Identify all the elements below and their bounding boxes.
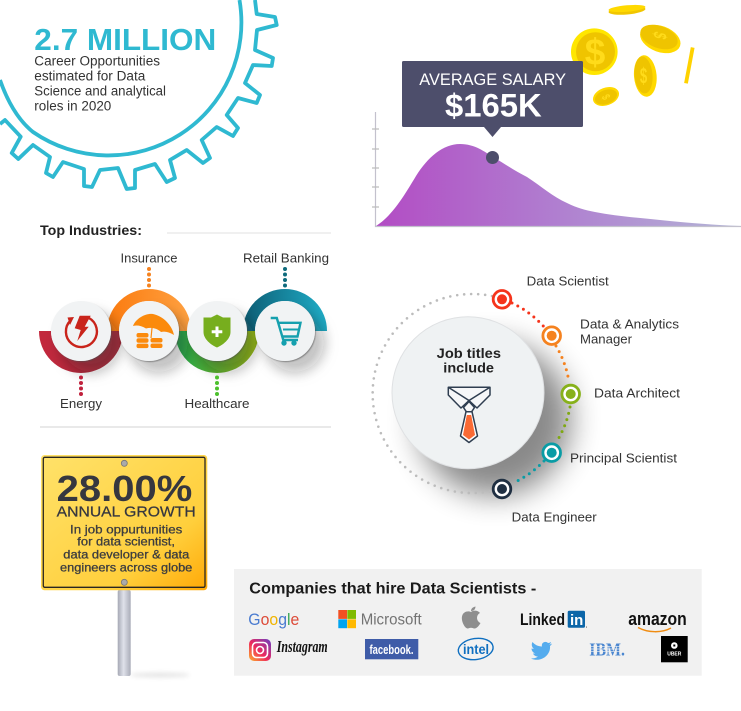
logo: linkedin: in [570,612,583,629]
description: Science and analytical [34,84,166,99]
retail banking [243,252,329,361]
logo: intel [457,636,494,662]
logo: linkedin: Linked [520,611,565,629]
logo: amazon: amazon [628,609,687,629]
logo: ibm: IBM. [589,640,625,660]
insurance [119,252,179,361]
principal scientist node: Principal Scientist [570,452,678,466]
sign board: for data scientist, [77,535,175,549]
healthcare: Healthcare [184,397,250,411]
dotted ring [373,294,570,493]
logo: instagram [249,637,328,661]
logo: facebook [365,639,418,659]
logo: apple [462,606,480,629]
icon: falling coins [571,4,693,109]
logo: microsoft [338,610,422,628]
retail banking: Retail Banking [243,252,329,266]
sign post [118,590,131,676]
icon: falling coins: $ [649,30,669,41]
logo: google: Google [248,611,299,629]
center circle [392,317,544,469]
callout: average salary: $165K [445,88,542,124]
logo: uber: UBER [667,652,682,658]
description: roles in 2020 [34,99,111,114]
center circle shadow [417,342,571,496]
principal scientist node [543,444,678,466]
icon: falling coins: $ [598,93,612,102]
logo: twitter [531,642,552,660]
panel: average salary [372,4,741,226]
data architect node: Data Architect [594,387,681,401]
sign board: data developer & data [63,547,190,561]
data scientist node [493,275,609,308]
insurance: Insurance [120,252,178,266]
panel: top industries [40,222,331,427]
panel: career opportunities [0,0,277,189]
sign board: ANNUAL GROWTH [57,505,196,521]
data and analytics manager node: Manager [580,332,632,346]
panel: annual growth sign [41,455,207,678]
sign board: 28.00% [57,468,192,509]
logo: uber [661,636,688,662]
healthcare [184,301,250,411]
center circle: Job titles [437,345,501,361]
energy: Energy [60,397,103,411]
icon: tie [448,387,490,442]
icon: falling coins: $ [640,64,647,88]
data and analytics manager node: Data & Analytics [580,318,679,332]
data engineer node [493,480,597,525]
logo: facebook: facebook. [370,643,414,657]
logo: intel: intel [463,641,489,657]
panel: job titles [373,275,681,525]
sign board [41,455,207,590]
post shadow [130,672,190,678]
icon: falling coins: $ [585,32,606,72]
logo: linkedin: . [586,620,588,630]
data architect node [562,385,681,403]
description: estimated for Data [34,69,146,84]
logo: microsoft: Microsoft [361,611,422,628]
sign board: In job oppurtunities [70,522,182,536]
heading: Companies that hire Data Scientists - [249,580,536,597]
data engineer node: Data Engineer [512,511,597,525]
heading: Top Industries: [40,222,142,238]
ring segments [45,295,321,367]
data scientist node: Data Scientist [527,275,609,289]
panel: companies [234,569,702,676]
description: Career Opportunities [34,54,160,69]
sign board: engineers across globe [60,561,193,575]
callout: average salary: AVERAGE SALARY [419,70,566,89]
callout: average salary [402,61,583,164]
chart: salary distribution curve [372,112,741,226]
data and analytics manager node [543,318,679,346]
headline number: 2.7 MILLION [34,23,216,57]
gear outline [0,0,277,189]
description [34,54,166,114]
logo: instagram: Instagram [276,637,328,656]
energy [51,301,111,411]
center circle: include [443,360,494,376]
